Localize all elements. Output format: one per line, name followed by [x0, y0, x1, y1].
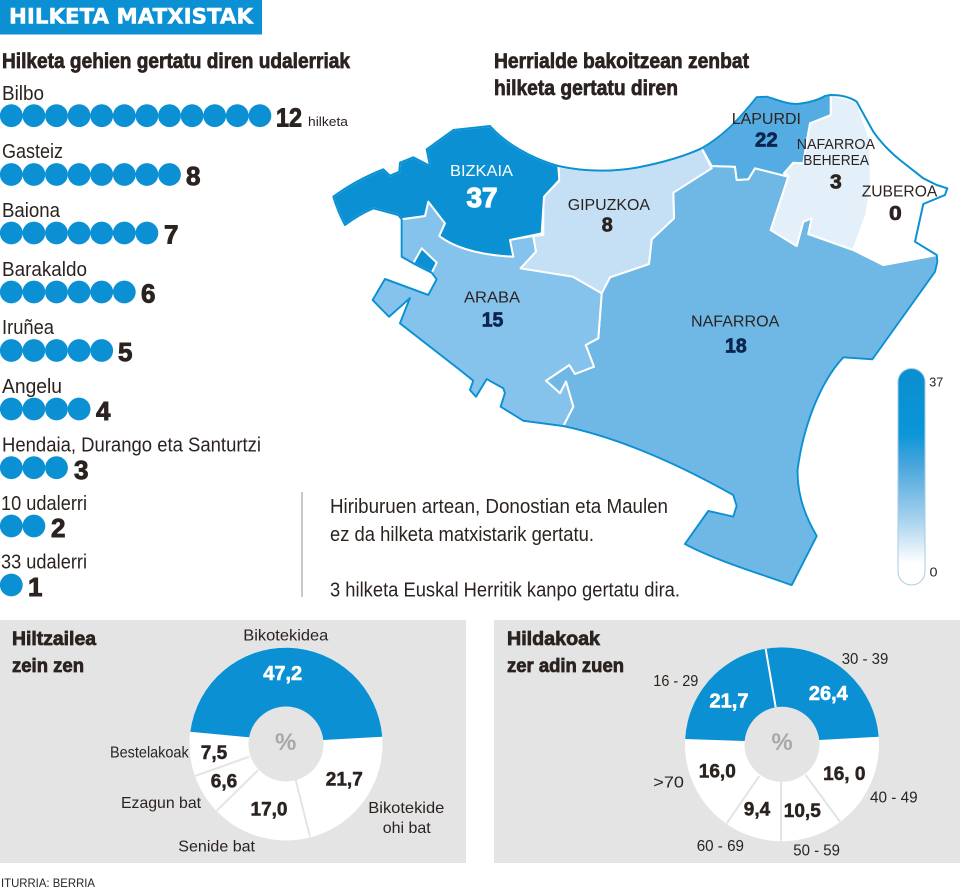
region: Nafarroa — [546, 166, 937, 585]
donut chart: age: 21,7 — [710, 690, 748, 712]
donut labels: killer: Bikotekide — [368, 800, 444, 817]
vertical divider — [301, 492, 303, 597]
panel heading: age: zer adin zuen — [507, 656, 624, 677]
row: Bilbo: Bilbo — [2, 83, 44, 105]
row: 33 udalerri: 1 — [28, 572, 42, 602]
panel heading: age — [507, 629, 624, 677]
donut chart: killer: 21,7 — [326, 770, 363, 790]
donut chart: age: 16,0 — [699, 762, 736, 782]
row: Gasteiz: 8 — [186, 161, 200, 191]
label: Nafarroa Beherea: NAFARROA — [797, 136, 875, 153]
donut chart: killer: 17,0 — [251, 800, 287, 820]
title banner: HILKETA MATXISTAK — [9, 4, 254, 28]
row: 10 udalerri: 2 — [51, 513, 65, 543]
panel heading: age: Hildakoak — [507, 629, 600, 650]
label: Zuberoa: 0 — [889, 203, 902, 225]
donut labels: age: 40 - 49 — [870, 789, 918, 806]
panel: killer — [0, 620, 466, 863]
donut chart: killer: 7,5 — [201, 743, 228, 764]
label: Lapurdi — [732, 111, 801, 152]
region: Lapurdi — [702, 95, 831, 180]
label: Nafarroa Beherea: 3 — [830, 172, 842, 194]
donut chart: killer — [190, 648, 382, 840]
panel: age — [494, 620, 960, 863]
note text: ez da hilketa matxistarik gertatu. — [330, 524, 594, 546]
row: Angelu — [0, 376, 111, 426]
region: Nafarroa Beherea — [771, 95, 871, 250]
label: Araba — [464, 290, 520, 332]
heading: map: Herrialde bakoitzean zenbat — [494, 50, 749, 73]
row: Angelu: Angelu — [2, 376, 62, 398]
label: Nafarroa — [691, 314, 780, 358]
donut labels: age — [653, 651, 918, 859]
source line: ITURRIA: BERRIA — [1, 878, 95, 890]
row: Iruñea — [0, 317, 132, 367]
label: Bizkaia: 37 — [466, 182, 498, 213]
donut labels: killer — [110, 628, 444, 856]
label: Lapurdi: LAPURDI — [732, 111, 801, 128]
donut labels: killer: Bestelakoak — [110, 744, 190, 762]
donut labels: age: 30 - 39 — [842, 651, 888, 668]
row: 33 udalerri: 33 udalerri — [1, 552, 87, 574]
note text: Hiriburuen artean, Donostian eta Maulen — [330, 496, 668, 518]
row: Bilbo — [0, 83, 349, 132]
row: Hendaia, Durango eta Santurtzi: 3 — [74, 455, 88, 485]
row: 10 udalerri — [0, 493, 87, 543]
row: 10 udalerri: 10 udalerri — [1, 493, 87, 515]
donut chart: age: % — [771, 729, 793, 756]
note text — [330, 496, 680, 602]
label: Araba: 15 — [482, 310, 503, 332]
donut labels: age: 16 - 29 — [653, 673, 698, 690]
region: Gipuzkoa — [521, 148, 712, 293]
donut chart: age: 26,4 — [809, 683, 849, 705]
panel heading: killer: zein zen — [12, 656, 84, 677]
row: Baiona: Baiona — [2, 200, 61, 222]
colour scale legend: 0 — [930, 564, 938, 580]
colour scale legend — [898, 368, 943, 585]
region: Bizkaia enclave — [413, 248, 437, 273]
label: Nafarroa: NAFARROA — [691, 314, 780, 330]
region: Araba — [373, 202, 602, 426]
row: Baiona: 7 — [164, 220, 178, 250]
donut labels: killer: Ezagun bat — [121, 795, 202, 812]
row: Barakaldo: 6 — [141, 278, 155, 308]
row: Bilbo: 12 — [276, 102, 302, 132]
row: Bilbo: hilketa — [308, 114, 349, 129]
donut labels: age: 50 - 59 — [793, 842, 840, 859]
donut labels: killer: Senide bat — [178, 838, 256, 856]
donut chart: killer: % — [275, 729, 296, 756]
donut chart: killer: 6,6 — [211, 772, 237, 792]
label: Lapurdi: 22 — [755, 130, 778, 152]
heading: map: hilketa gertatu diren — [494, 77, 678, 100]
donut chart: age — [685, 647, 879, 841]
dot chart: municipalities — [0, 83, 349, 602]
donut labels: age: >70 — [653, 774, 684, 792]
panel heading: killer — [12, 629, 96, 677]
row: Angelu: 4 — [96, 396, 111, 426]
choropleth map — [333, 95, 947, 585]
label: Gipuzkoa: 8 — [602, 214, 613, 236]
row: Gasteiz — [0, 141, 200, 191]
donut chart: age: 9,4 — [744, 800, 771, 820]
row: Hendaia, Durango eta Santurtzi — [0, 434, 261, 485]
row: Gasteiz: Gasteiz — [2, 141, 63, 163]
donut chart: age: 16, 0 — [823, 764, 865, 785]
donut chart: killer: 47,2 — [263, 663, 302, 685]
label: Araba: ARABA — [464, 290, 520, 306]
row: 33 udalerri — [0, 552, 87, 602]
row: Baiona — [0, 200, 178, 250]
donut labels: killer: ohi bat — [383, 820, 431, 837]
colour scale legend: 37 — [929, 375, 943, 390]
region: Zuberoa — [853, 102, 947, 265]
note text: 3 hilketa Euskal Herritik kanpo gertatu dira. — [330, 580, 680, 602]
map outline — [333, 95, 947, 585]
label: Bizkaia: BIZKAIA — [450, 163, 513, 180]
row: Barakaldo: Barakaldo — [2, 259, 87, 281]
label: Gipuzkoa: GIPUZKOA — [568, 197, 650, 214]
donut labels: age: 60 - 69 — [697, 838, 744, 855]
label: Nafarroa Beherea — [797, 136, 875, 194]
label: Zuberoa — [862, 184, 938, 225]
title banner — [0, 0, 262, 34]
donut chart: age: 10,5 — [784, 801, 821, 822]
row: Iruñea: 5 — [118, 337, 132, 367]
label: Gipuzkoa — [568, 197, 650, 236]
label: Zuberoa: ZUBEROA — [862, 184, 938, 200]
region: Bizkaia — [333, 126, 559, 257]
panel heading: killer: Hiltzailea — [12, 629, 96, 650]
row: Hendaia, Durango eta Santurtzi: Hendaia, Durango eta Santurtzi — [2, 434, 261, 456]
label: Bizkaia — [450, 163, 513, 213]
row: Iruñea: Iruñea — [2, 317, 55, 339]
label: Nafarroa: 18 — [725, 336, 747, 358]
heading: municipalities: Hilketa gehien gertatu diren udalerriak — [2, 50, 350, 73]
row: Barakaldo — [0, 259, 155, 308]
donut labels: killer: Bikotekidea — [243, 628, 328, 644]
label: Nafarroa Beherea: BEHEREA — [803, 152, 869, 169]
heading: map — [494, 50, 749, 100]
